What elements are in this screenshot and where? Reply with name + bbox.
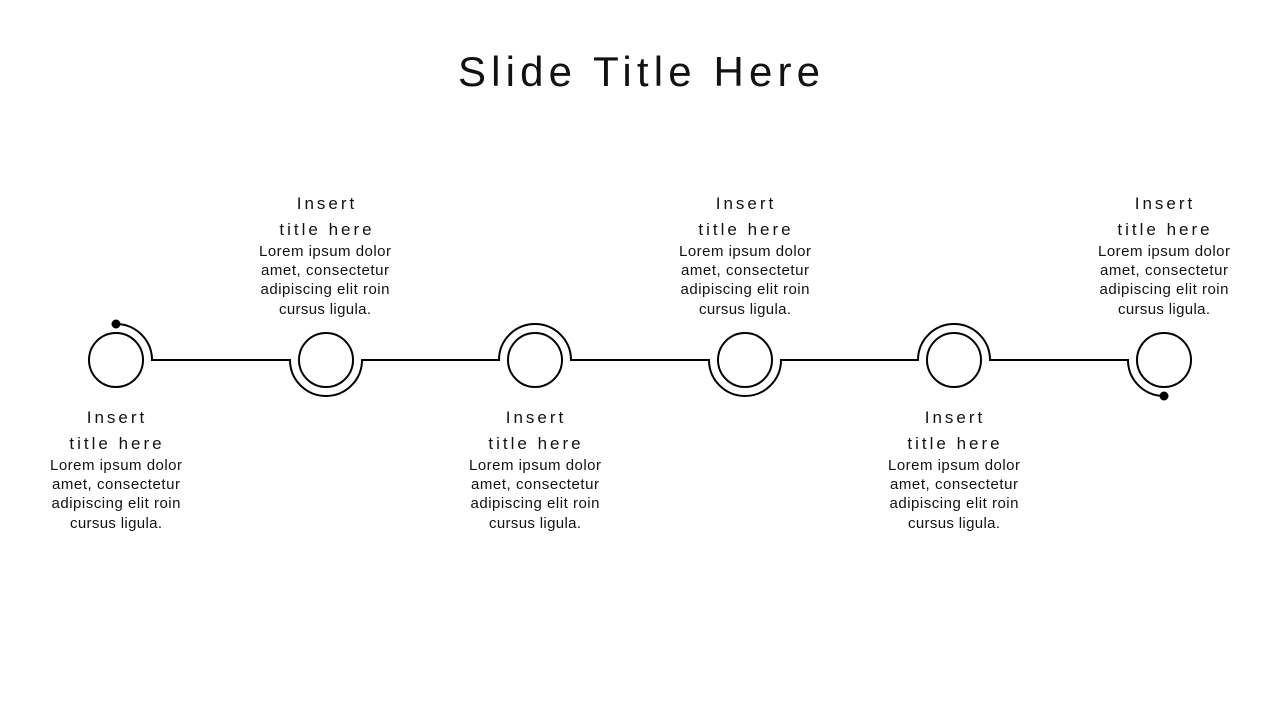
text block 4 (top): amet, consectetur (681, 262, 809, 279)
text block 1 (bottom): cursus ligula. (70, 515, 162, 532)
text block 6 (top): cursus ligula. (1118, 301, 1210, 318)
text block 2 (top): amet, consectetur (261, 262, 389, 279)
title: Slide Title Here (458, 48, 820, 95)
text block 5 (bottom): Insert (925, 408, 985, 427)
text block 6 (top): Lorem ipsum dolor (1098, 243, 1230, 260)
text block 6 (top): title here (1117, 220, 1213, 239)
text block 2 (top): Lorem ipsum dolor (259, 243, 391, 260)
text block 6 (top): adipiscing elit roin (1100, 281, 1228, 298)
text block 3 (bottom): Lorem ipsum dolor (469, 457, 601, 474)
text block 5 (bottom): Lorem ipsum dolor (888, 457, 1020, 474)
text block 2 (top): adipiscing elit roin (260, 281, 390, 298)
text block 1 (bottom): amet, consectetur (52, 476, 180, 493)
text block 1 (bottom) (50, 408, 182, 532)
text block 3 (bottom): title here (488, 434, 584, 453)
timeline connector (116, 324, 1164, 396)
text block 5 (bottom): amet, consectetur (890, 476, 1018, 493)
text block 3 (bottom): Insert (506, 408, 566, 427)
text block 1 (bottom): title here (69, 434, 165, 453)
text block 4 (top): cursus ligula. (699, 301, 791, 318)
milestone circles (89, 333, 1191, 387)
text block 3 (bottom): amet, consectetur (471, 476, 599, 493)
text block 5 (bottom) (888, 408, 1020, 532)
text block 2 (top) (259, 194, 391, 318)
text block 1 (bottom): Lorem ipsum dolor (50, 457, 182, 474)
text block 2 (top): title here (279, 220, 375, 239)
text block 3 (bottom) (469, 408, 601, 532)
icon: start dot (112, 320, 120, 328)
text block 6 (top) (1098, 194, 1230, 318)
text block 6 (top): Insert (1135, 194, 1195, 213)
text block 4 (top) (679, 194, 811, 318)
text block 5 (bottom): title here (907, 434, 1003, 453)
text block 2 (top): cursus ligula. (279, 301, 371, 318)
text block 6 (top): amet, consectetur (1100, 262, 1228, 279)
text block 3 (bottom): adipiscing elit roin (470, 495, 600, 512)
icon: end dot (1160, 392, 1168, 400)
text block 1 (bottom): adipiscing elit roin (52, 495, 180, 512)
text block 4 (top): adipiscing elit roin (680, 281, 810, 298)
text block 2 (top): Insert (297, 194, 357, 213)
text block 4 (top): Lorem ipsum dolor (679, 243, 811, 260)
text block 3 (bottom): cursus ligula. (489, 515, 581, 532)
text block 4 (top): Insert (716, 194, 776, 213)
text block 5 (bottom): cursus ligula. (908, 515, 1000, 532)
text block 1 (bottom): Insert (87, 408, 147, 427)
text block 4 (top): title here (698, 220, 794, 239)
text block 5 (bottom): adipiscing elit roin (890, 495, 1018, 512)
